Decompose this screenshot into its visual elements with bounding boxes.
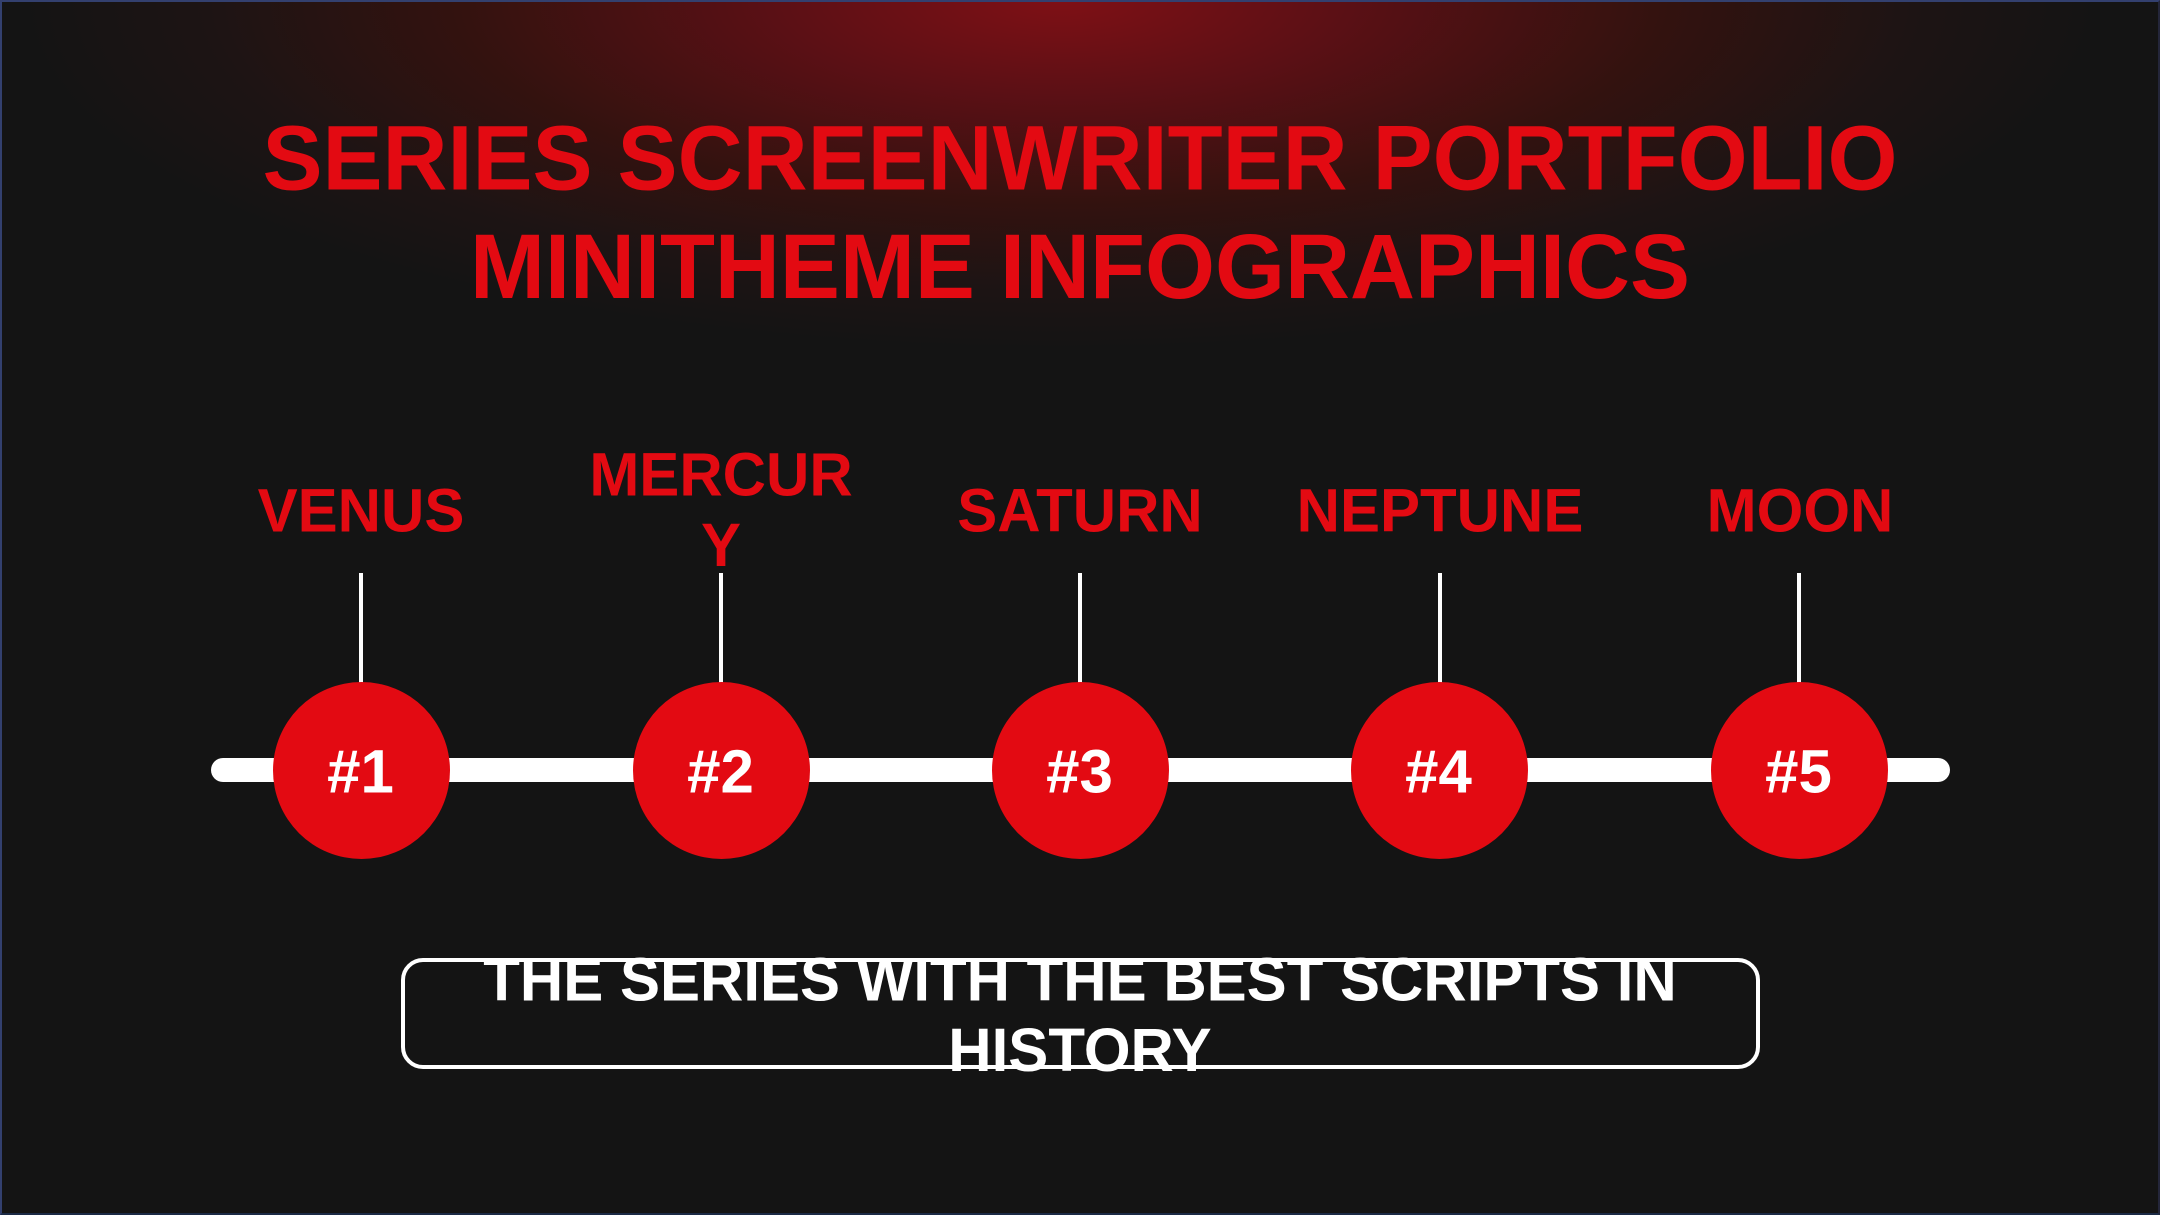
callout text	[483, 945, 1677, 1084]
label: Saturn: SATURN	[957, 476, 1203, 545]
marker #3: #3	[1046, 737, 1113, 806]
label: Venus: VENUS	[258, 476, 464, 545]
marker #1	[273, 682, 450, 859]
connector stem 1	[359, 573, 363, 683]
connector stem 5	[1797, 573, 1801, 683]
title	[262, 108, 1898, 318]
timeline bar	[211, 758, 1950, 782]
label: Mercury: Y	[701, 511, 741, 580]
title: MINITHEME INFOGRAPHICS	[470, 216, 1690, 318]
connector stem 3	[1078, 573, 1082, 683]
marker #1: #1	[327, 737, 394, 806]
marker #4: #4	[1405, 737, 1472, 806]
marker #4	[1351, 682, 1528, 859]
callout text: HISTORY	[948, 1016, 1212, 1084]
callout text: THE SERIES WITH THE BEST SCRIPTS IN	[483, 945, 1677, 1013]
connector stem 2	[719, 573, 723, 683]
callout box	[401, 958, 1760, 1069]
marker #5: #5	[1765, 737, 1832, 806]
marker #3	[992, 682, 1169, 859]
marker #2: #2	[687, 737, 754, 806]
marker #2	[633, 682, 810, 859]
label: Mercury	[589, 440, 853, 580]
connector stem 4	[1438, 573, 1442, 683]
label: Moon: MOON	[1707, 476, 1893, 545]
marker #5	[1711, 682, 1888, 859]
label: Mercury: MERCUR	[589, 440, 853, 509]
label: Neptune: NEPTUNE	[1297, 476, 1583, 545]
title: SERIES SCREENWRITER PORTFOLIO	[262, 108, 1898, 210]
